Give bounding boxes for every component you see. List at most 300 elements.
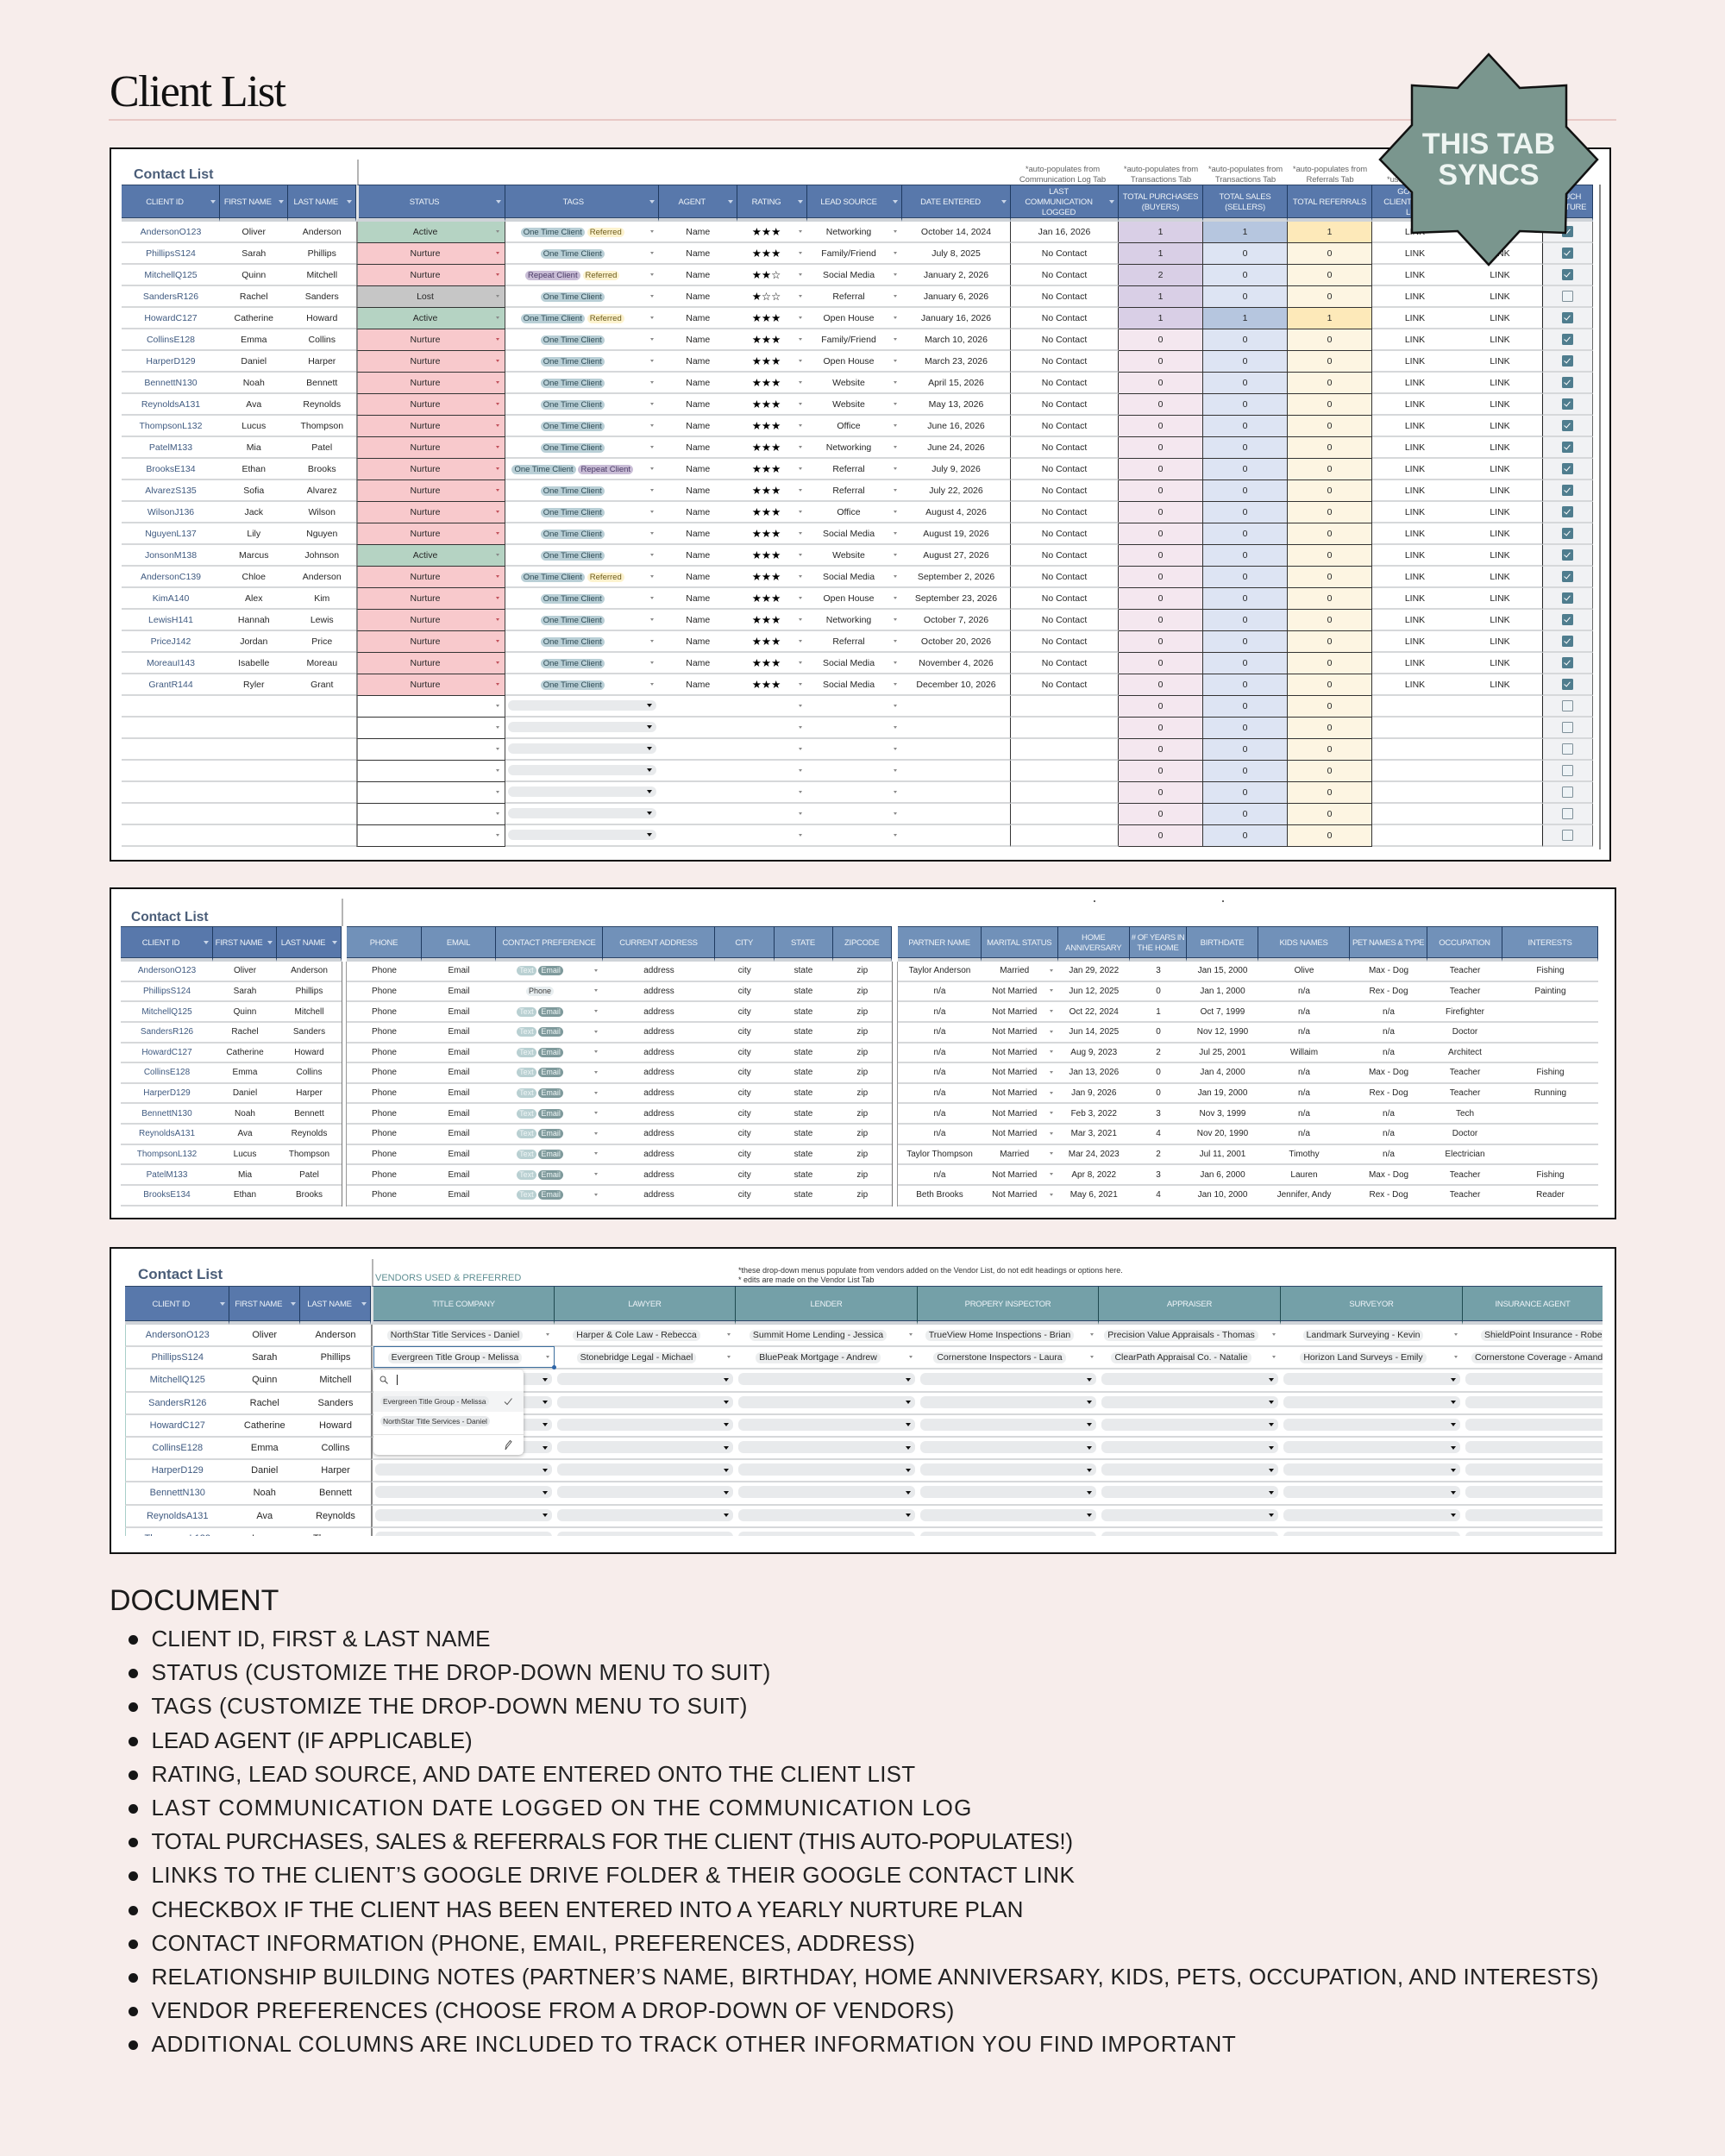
client rows: Referral	[832, 486, 865, 496]
client rows: Networking	[826, 226, 871, 236]
client rows: Noah	[243, 378, 265, 388]
client rows: Rex - Dog	[1369, 1190, 1408, 1200]
client rows: Email	[541, 1109, 561, 1118]
client rows: 0	[1327, 270, 1332, 280]
client rows: 0	[1327, 658, 1332, 668]
client rows: Name	[686, 378, 710, 388]
client rows: PatelM133	[147, 1170, 187, 1180]
client rows: Lewis	[310, 615, 334, 625]
client rows: Teacher	[1450, 1190, 1480, 1200]
client rows: n/a	[934, 987, 945, 996]
client rows: Olive	[1295, 966, 1314, 975]
client rows: Jan 29, 2022	[1069, 966, 1119, 975]
client rows: HowardC127	[141, 1048, 192, 1057]
client rows: 0	[1327, 572, 1332, 582]
client rows: Rachel	[240, 291, 268, 302]
client rows: Price	[311, 636, 332, 647]
client rows: Family/Friend	[821, 248, 876, 259]
client rows: October 20, 2026	[921, 636, 991, 647]
client rows: Referred	[590, 228, 622, 236]
client rows: Social Media	[823, 680, 875, 690]
client rows: n/a	[1298, 1129, 1310, 1138]
client rows: AndersonC139	[141, 572, 201, 582]
client rows: n/a	[934, 1129, 945, 1138]
client rows: address	[643, 1129, 674, 1138]
client rows: Anderson	[291, 966, 328, 975]
client rows: ★☆☆	[752, 290, 781, 303]
client rows: Teacher	[1450, 1170, 1480, 1180]
client rows: Harper	[296, 1088, 323, 1098]
client rows: 0	[1243, 335, 1247, 345]
client rows: n/a	[934, 1170, 945, 1180]
client rows: Repeat Client	[528, 271, 578, 280]
client rows: LINK	[1490, 356, 1510, 367]
client rows: Email	[448, 1170, 469, 1180]
client rows: Nurture	[410, 486, 440, 496]
column headers: LINK	[1490, 207, 1509, 217]
client rows: Text	[519, 1129, 534, 1138]
client rows: LINK	[1490, 636, 1510, 647]
client rows: Phillips	[296, 987, 323, 996]
client rows: Nurture	[410, 399, 440, 410]
client rows: Doctor	[1452, 1027, 1477, 1037]
client rows: Active	[413, 313, 437, 323]
client rows: 0	[1243, 442, 1247, 453]
client rows: Grant	[310, 680, 333, 690]
client rows: LINK	[1490, 658, 1510, 668]
client rows: Jan 13, 2026	[1069, 1068, 1119, 1077]
column headers: TOTAL SALES	[1220, 191, 1270, 202]
client rows: Phone	[372, 966, 397, 975]
client rows: 0	[1327, 701, 1332, 711]
client rows: Isabelle	[238, 658, 269, 668]
client rows: 1	[1158, 227, 1163, 237]
client rows: ★★★	[752, 505, 781, 518]
client rows: Daniel	[233, 1088, 257, 1098]
client rows: ReynoldsA131	[141, 399, 200, 410]
client rows: Ryler	[243, 680, 264, 690]
client rows: Anderson	[315, 1330, 356, 1340]
client rows: Electrician	[1445, 1150, 1485, 1159]
client rows: Name	[686, 270, 710, 280]
client rows: MitchellQ125	[144, 270, 198, 280]
client rows: One Time Client	[543, 422, 602, 431]
client rows: 0	[1243, 766, 1247, 776]
column headers: PARTNER NAME	[908, 938, 970, 947]
column headers: CLIENT ID	[152, 1299, 190, 1309]
client rows: One Time Client	[543, 637, 602, 647]
client rows: One Time Client	[524, 573, 582, 582]
client rows: Email	[448, 1088, 469, 1098]
client rows: Social Media	[823, 572, 875, 582]
client rows: CollinsE128	[144, 1068, 190, 1077]
client rows: No Contact	[1042, 291, 1087, 302]
client rows: July 22, 2026	[929, 486, 983, 496]
client rows: Quinn	[234, 1007, 256, 1017]
client rows: Nurture	[410, 442, 440, 453]
client rows: 0	[1327, 680, 1332, 690]
client rows: MitchellQ125	[141, 1007, 192, 1017]
client rows: Text	[519, 966, 534, 975]
client rows: Jul 25, 2001	[1199, 1048, 1246, 1057]
client rows: Email	[541, 1048, 561, 1056]
client rows: No Contact	[1042, 593, 1087, 604]
client rows: No Contact	[1042, 529, 1087, 539]
bullet: rating: RATING, LEAD SOURCE, AND DATE ENTERED ONTO THE CLIENT LIST	[152, 1761, 915, 1787]
client rows: Rex - Dog	[1369, 987, 1408, 996]
client rows: One Time Client	[543, 292, 602, 302]
client rows: Ava	[256, 1511, 273, 1521]
bullet: checkbox: CHECKBOX IF THE CLIENT HAS BEEN ENTERED INTO A YEARLY NURTURE PLAN	[152, 1896, 1023, 1921]
client rows: 1	[1327, 313, 1332, 323]
client rows: No Contact	[1042, 335, 1087, 345]
client rows: January 2, 2026	[924, 270, 988, 280]
client rows: Collins	[296, 1068, 323, 1077]
client rows: zip	[856, 1190, 868, 1200]
client rows: Doctor	[1452, 1129, 1477, 1138]
client rows: Text	[519, 1088, 534, 1097]
client rows: HowardC127	[144, 313, 198, 323]
client rows: Jan 4, 2000	[1200, 1068, 1245, 1077]
note: sales: *auto-populates from	[1208, 165, 1283, 174]
bullet: totals: TOTAL PURCHASES, SALES & REFERRALS FOR THE CLIENT (THIS AUTO-POPULATES!)	[152, 1828, 1073, 1854]
client rows: 0	[1158, 486, 1163, 496]
column headers: LAST NAME	[307, 1299, 352, 1309]
client rows: address	[643, 1150, 674, 1159]
heading: vendors used and preferred: VENDORS USED & PREFERRED	[375, 1273, 521, 1283]
client rows: AndersonO123	[138, 966, 196, 975]
client rows: Jan 1, 2000	[1200, 987, 1245, 996]
client rows: 0	[1158, 636, 1163, 647]
client rows: Howard	[306, 313, 337, 323]
client rows: Alvarez	[307, 486, 337, 496]
client rows: 0	[1243, 615, 1247, 625]
column headers: LAST NAME	[281, 938, 325, 947]
client rows: LINK	[1405, 378, 1425, 388]
client rows: 1	[1158, 313, 1163, 323]
column headers: CLIENT FOLDER	[1383, 197, 1446, 207]
column headers: COMMUNICATION	[1025, 197, 1093, 207]
client rows: 3	[1156, 966, 1161, 975]
client rows: Thompson	[289, 1150, 329, 1159]
client rows: One Time Client	[524, 314, 582, 323]
client rows: ReynoldsA131	[139, 1129, 195, 1138]
column headers: STATUS	[410, 197, 439, 207]
client rows: Name	[686, 248, 710, 259]
client rows: Email	[541, 1088, 561, 1097]
client rows: LINK	[1405, 421, 1425, 431]
client rows: Not Married	[992, 1129, 1037, 1138]
column headers: LAST NAME	[294, 197, 338, 207]
client rows: Mia	[247, 442, 261, 453]
client rows: Not Married	[992, 1170, 1037, 1180]
client rows: 0	[1243, 291, 1247, 302]
client rows: One Time Client	[514, 465, 574, 474]
client rows: ThompsonL132	[137, 1150, 197, 1159]
client rows: Nurture	[410, 615, 440, 625]
client rows: One Time Client	[543, 508, 602, 517]
client rows: Sanders	[317, 1398, 353, 1408]
client rows: Email	[541, 966, 561, 975]
client rows: Reynolds	[303, 399, 341, 410]
note: communication log: *auto-populates from	[1026, 165, 1100, 174]
client rows: 0	[1327, 378, 1332, 388]
client rows: Nurture	[410, 680, 440, 690]
column headers: CONTACT PREFERENCE	[502, 938, 596, 947]
client rows: Referral	[832, 291, 865, 302]
note: sales	[1208, 165, 1283, 185]
client rows: June 24, 2026	[927, 442, 985, 453]
client rows: Summit Home Lending - Jessica	[753, 1330, 883, 1340]
client rows: ★★★	[752, 333, 781, 346]
client rows: 0	[1158, 464, 1163, 474]
client rows: 1	[1243, 313, 1247, 323]
badge: this tab syncs	[1378, 53, 1599, 266]
client rows: Marcus	[239, 550, 268, 561]
client rows: ★★★	[752, 247, 781, 260]
client rows: One Time Client	[543, 357, 602, 367]
client rows: n/a	[934, 1068, 945, 1077]
client rows: address	[643, 1007, 674, 1017]
client rows: Emma	[251, 1443, 279, 1453]
client rows: Referral	[832, 636, 865, 647]
client rows: address	[643, 987, 674, 996]
client rows: state	[794, 966, 812, 975]
client rows: Text	[519, 1027, 534, 1036]
client rows: Moreau	[306, 658, 337, 668]
client rows: Email	[448, 1048, 469, 1057]
client rows: LINK	[1490, 442, 1510, 453]
column headers: NURTURE	[1548, 202, 1586, 212]
client rows: May 13, 2026	[929, 399, 983, 410]
client rows: Jan 19, 2000	[1198, 1088, 1247, 1098]
column headers: FIRST NAME	[235, 1299, 282, 1309]
client rows: LINK	[1405, 680, 1425, 690]
selected cell outline	[373, 1346, 555, 1368]
client rows: Sarah	[242, 248, 266, 259]
client rows: LINK	[1490, 593, 1510, 604]
client rows: Sarah	[234, 987, 256, 996]
column headers: MARITAL STATUS	[987, 938, 1051, 947]
client rows: Email	[448, 987, 469, 996]
client rows: Nurture	[410, 335, 440, 345]
client rows: 3	[1156, 1109, 1161, 1119]
client rows: JonsonM138	[145, 550, 197, 561]
client rows: Nurture	[410, 507, 440, 517]
client rows: n/a	[934, 1048, 945, 1057]
client rows: Stonebridge Legal - Michael	[580, 1352, 693, 1363]
client rows: Jan 16, 2026	[1038, 226, 1090, 236]
client rows: MoreauI143	[147, 658, 195, 668]
column headers: CLIENT ID	[142, 938, 179, 947]
client rows: 1	[1327, 227, 1332, 237]
client rows: Nurture	[410, 378, 440, 388]
client rows: Catherine	[226, 1048, 264, 1057]
column headers: INSURANCE AGENT	[1495, 1299, 1571, 1309]
client rows: LINK	[1405, 615, 1425, 625]
client rows: HarperD129	[146, 356, 196, 367]
client rows: Name	[686, 313, 710, 323]
client rows: Landmark Surveying - Kevin	[1307, 1330, 1420, 1340]
client rows: July 9, 2026	[932, 464, 981, 474]
client rows: LINK	[1405, 636, 1425, 647]
client rows: HarperD129	[152, 1465, 204, 1476]
client rows: n/a	[1298, 1068, 1310, 1077]
client rows: One Time Client	[543, 659, 602, 668]
client rows: LINK	[1490, 615, 1510, 625]
column headers: TOUCH	[1553, 191, 1581, 202]
column headers: LAST	[1049, 186, 1069, 197]
client rows: SandersR126	[141, 1027, 193, 1037]
client rows: Running	[1534, 1088, 1566, 1098]
client rows: ReynoldsA131	[147, 1511, 209, 1521]
client rows: 0	[1243, 356, 1247, 367]
client rows: September 2, 2026	[918, 572, 994, 582]
client rows: Jack	[244, 507, 263, 517]
client rows: Not Married	[992, 1007, 1037, 1017]
client rows: 0	[1158, 550, 1163, 561]
client rows: Catherine	[234, 313, 273, 323]
client rows: 1	[1156, 1007, 1161, 1017]
client rows: Reader	[1536, 1190, 1565, 1200]
client rows: Website	[832, 399, 865, 410]
client rows: Reynolds	[292, 1129, 327, 1138]
client rows: Lucus	[234, 1150, 256, 1159]
client rows: Lily	[247, 529, 260, 539]
client rows: Website	[832, 378, 865, 388]
client rows: ThompsonL132	[140, 421, 202, 431]
client rows: zip	[856, 1109, 868, 1119]
client rows: No Contact	[1042, 636, 1087, 647]
client rows: 0	[1243, 658, 1247, 668]
column headers: TITLE COMPANY	[432, 1299, 495, 1309]
client rows: LINK	[1490, 270, 1510, 280]
client rows: LINK	[1490, 486, 1510, 496]
client rows: Reynolds	[316, 1511, 355, 1521]
client rows: No Contact	[1042, 486, 1087, 496]
client rows: Name	[686, 486, 710, 496]
client rows: Not Married	[992, 1027, 1037, 1037]
client rows: Phone	[372, 1170, 397, 1180]
client rows: Name	[686, 399, 710, 410]
note: communication log: Communication Log Tab	[1019, 174, 1106, 185]
client rows: Phone	[372, 987, 397, 996]
client rows: Name	[686, 226, 710, 236]
client rows: zip	[856, 1150, 868, 1159]
client rows: Quinn	[252, 1375, 277, 1385]
client rows: 0	[1243, 421, 1247, 431]
client rows: ★★☆	[752, 268, 781, 281]
client rows: LewisH141	[148, 615, 193, 625]
client rows: Office	[837, 421, 861, 431]
client rows: Name	[686, 680, 710, 690]
client rows: Ethan	[234, 1190, 256, 1200]
client rows: Active	[413, 550, 437, 561]
client rows: Text	[519, 1170, 534, 1179]
client rows: Bennett	[319, 1488, 352, 1498]
client rows: Firefighter	[1446, 1007, 1484, 1017]
note: communication log	[1019, 165, 1106, 185]
client rows: 0	[1327, 615, 1332, 625]
client rows: ★★★	[752, 527, 781, 540]
client rows: Name	[686, 291, 710, 302]
client rows: Referred	[585, 271, 617, 280]
heading: document: DOCUMENT	[110, 1584, 279, 1617]
client rows: LINK	[1490, 313, 1510, 323]
column headers: GOOGLE	[1397, 186, 1432, 197]
client rows: address	[643, 1170, 674, 1180]
client rows: MitchellQ125	[150, 1375, 205, 1385]
client rows: Brooks	[296, 1190, 323, 1200]
client rows: 0	[1158, 507, 1163, 517]
client rows: No Contact	[1042, 615, 1087, 625]
client rows: 0	[1158, 830, 1163, 841]
client rows: 0	[1243, 744, 1247, 755]
client rows: One Time Client	[543, 680, 602, 690]
client rows: One Time Client	[543, 486, 602, 496]
client rows: Howard	[294, 1048, 324, 1057]
client rows: Email	[541, 1170, 561, 1179]
client rows: 0	[1327, 442, 1332, 453]
client rows: LINK	[1405, 486, 1425, 496]
client rows: Mitchell	[319, 1375, 352, 1385]
client rows: 0	[1243, 680, 1247, 690]
client rows: Feb 3, 2022	[1071, 1109, 1117, 1119]
client rows: Referred	[590, 573, 622, 582]
client rows: Email	[541, 1129, 561, 1138]
client rows: state	[794, 1007, 812, 1017]
client rows: Email	[448, 1007, 469, 1017]
client rows: Name	[686, 615, 710, 625]
client rows: Phone	[372, 1109, 397, 1119]
client rows: No Contact	[1042, 464, 1087, 474]
column headers: (BUYERS)	[1142, 202, 1179, 212]
client rows: n/a	[1383, 1048, 1395, 1057]
client rows: n/a	[934, 1007, 945, 1017]
bullet: status: STATUS (CUSTOMIZE THE DROP-DOWN MENU TO SUIT)	[152, 1659, 771, 1685]
client rows: ★★★	[752, 441, 781, 454]
client rows: December 10, 2026	[916, 680, 996, 690]
client rows: Name	[686, 507, 710, 517]
client rows: Social Media	[823, 270, 875, 280]
client rows: zip	[856, 1007, 868, 1017]
client rows: No Contact	[1042, 399, 1087, 410]
client rows: Howard	[319, 1420, 352, 1431]
client rows: 0	[1327, 486, 1332, 496]
client rows: LINK	[1490, 399, 1510, 410]
client rows: LINK	[1405, 313, 1425, 323]
client rows: 0	[1327, 291, 1332, 302]
client rows: Alex	[245, 593, 262, 604]
client rows: No Contact	[1042, 378, 1087, 388]
client rows: 0	[1327, 636, 1332, 647]
client rows: address	[643, 1190, 674, 1200]
client rows: Anderson	[303, 226, 342, 236]
heading: contact list: Contact List	[131, 909, 209, 924]
client rows: city	[738, 1068, 751, 1077]
client rows: 0	[1327, 766, 1332, 776]
client rows: LINK	[1490, 335, 1510, 345]
client rows: city	[738, 1007, 751, 1017]
note: referrals: *auto-populates from	[1293, 165, 1367, 174]
client rows: LINK	[1405, 356, 1425, 367]
client rows: Name	[686, 335, 710, 345]
client rows: LINK	[1405, 226, 1425, 236]
client rows: 0	[1327, 787, 1332, 798]
client rows: Phone	[372, 1007, 397, 1017]
client rows: Jennifer, Andy	[1277, 1190, 1331, 1200]
client rows: 0	[1156, 1088, 1161, 1098]
